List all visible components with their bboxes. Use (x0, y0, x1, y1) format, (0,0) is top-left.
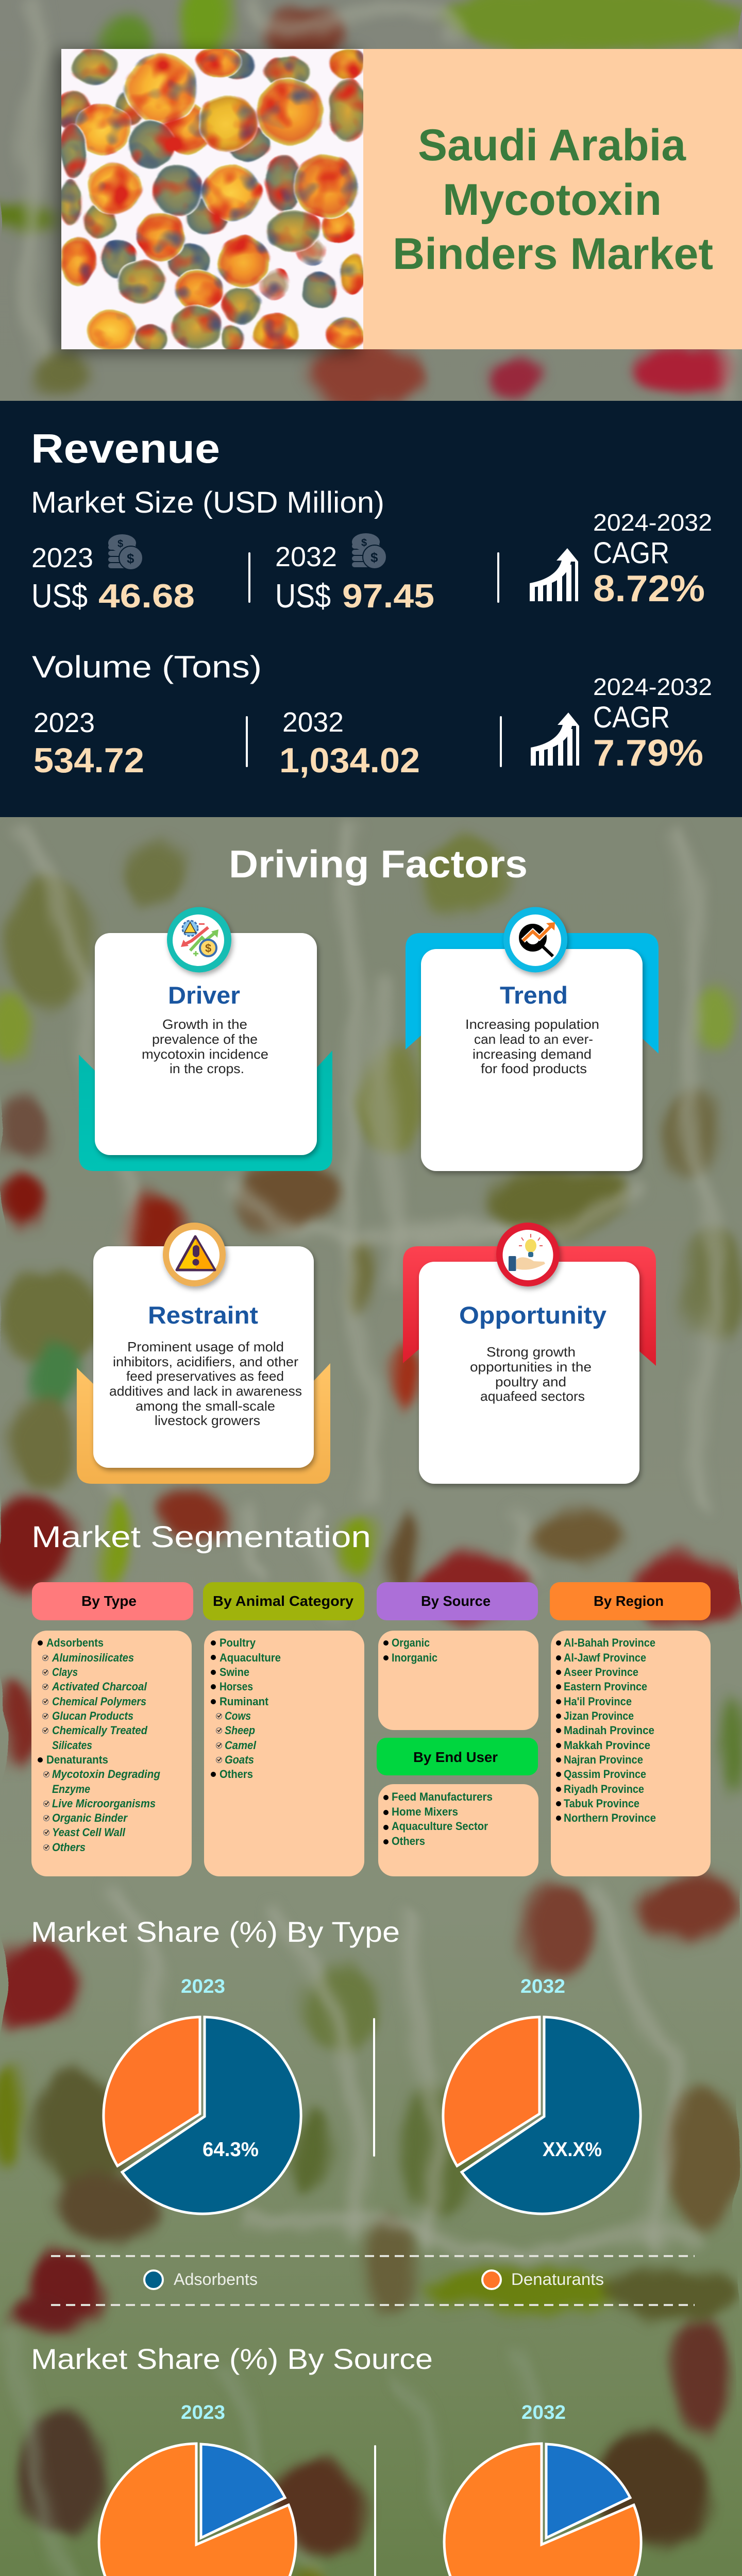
legend: type: Adsorbents (174, 2270, 258, 2289)
list: by type (38, 1636, 161, 1854)
list: by type: Enzyme (52, 1783, 90, 1795)
text: trend body: increasing demand (473, 1046, 592, 1062)
stat: revenue CAGR (593, 509, 712, 609)
icon: growth chart (530, 548, 578, 601)
list: by end user: Others (392, 1835, 425, 1848)
text: opportunity body: opportunities in the (470, 1359, 592, 1375)
list: by type: Aluminosilicates (52, 1651, 134, 1664)
list: by animal category: Poultry (220, 1636, 256, 1649)
text: trend body (465, 1016, 599, 1076)
icon: coins 2023: $ (117, 538, 123, 550)
text: restraint body: Prominent usage of mold (127, 1339, 284, 1354)
text: restraint body: additives and lack in awareness (109, 1383, 302, 1399)
text: restraint body: feed preservatives as feed (126, 1368, 284, 1384)
list: by type: Chemically Treated (52, 1724, 148, 1737)
list: by region: Eastern Province (564, 1680, 647, 1693)
stat: 2032 volume (279, 707, 420, 780)
list: by animal category: Others (220, 1768, 253, 1781)
panel: by animal category: By Animal Category (213, 1593, 353, 1609)
icon: driver (167, 907, 231, 973)
chart: source share 2032: 2032 (521, 2402, 566, 2424)
text: driver body: Growth in the (162, 1016, 247, 1032)
panel: by source (377, 1582, 538, 1730)
list: by region: Ha'il Province (564, 1695, 632, 1708)
panel: opportunity (403, 1223, 656, 1484)
heading: volume: Volume (Tons) (32, 650, 262, 684)
chart: type share 2023: 2023 (181, 1976, 225, 1997)
panel: by end user (377, 1738, 538, 1876)
heading: opportunity: Opportunity (459, 1301, 606, 1329)
panel: by animal category (203, 1582, 364, 1876)
list: by type: Yeast Cell Wall (52, 1826, 126, 1839)
text: restraint body: inhibitors, acidifiers, and other (113, 1354, 298, 1369)
stat: 2032 volume: 2032 (282, 707, 344, 738)
chart: type share 2023 (104, 1976, 301, 2214)
list: by animal category: Horses (220, 1680, 253, 1693)
stat: volume CAGR (593, 673, 712, 774)
title panel (363, 49, 742, 349)
stat: 2032 market size (275, 533, 434, 615)
list: by region: Northern Province (564, 1811, 656, 1824)
panel: restraint (77, 1223, 330, 1484)
list: by end user (383, 1790, 493, 1848)
icon: coins 2032: $ (361, 537, 367, 549)
panel: by region (550, 1582, 711, 1876)
list: by type: Silicates (52, 1739, 92, 1752)
list: by type: Live Microorganisms (52, 1797, 156, 1810)
panel: trend (406, 907, 659, 1171)
list: by region: Al-Jawf Province (564, 1651, 646, 1664)
list: by type: Clays (52, 1666, 78, 1679)
list: by region: Makkah Province (564, 1739, 650, 1752)
icon: coins 2032: $ (370, 550, 378, 565)
icon: restraint (163, 1223, 226, 1286)
icon: opportunity (496, 1223, 560, 1286)
list: by source (383, 1636, 437, 1664)
text: opportunity body: aquafeed sectors (480, 1388, 585, 1404)
text: restraint body (109, 1339, 302, 1428)
list: by source: Inorganic (392, 1651, 437, 1664)
stat: 2023 volume (33, 707, 144, 780)
title text: Mycotoxin (443, 175, 662, 225)
icon: growth chart volume (531, 713, 579, 766)
panel: by type: By Type (81, 1593, 137, 1609)
stat: volume CAGR: 2024-2032 (593, 673, 712, 700)
list: by region (556, 1636, 656, 1824)
stat: 2032 market size: 97.45 (342, 577, 434, 615)
heading: market size: Market Size (USD Million) (31, 486, 384, 519)
list: by end user: Home Mixers (392, 1805, 458, 1818)
chart: source share 2023: 2023 (181, 2402, 225, 2424)
stat: 2032 volume: 1,034.02 (279, 741, 420, 780)
heading: restraint: Restraint (148, 1301, 258, 1329)
list: by type: Mycotoxin Degrading (52, 1768, 161, 1781)
list: by end user: Feed Manufacturers (392, 1790, 493, 1803)
list: by region: Aseer Province (564, 1666, 638, 1679)
list: by animal category: Cows (225, 1709, 251, 1722)
list: by region: Madinah Province (564, 1724, 654, 1737)
chart: type share 2032: XX.X% (543, 2139, 602, 2161)
list: by end user: Aquaculture Sector (392, 1820, 488, 1833)
text: restraint body: livestock growers (155, 1413, 260, 1428)
heading: revenue: Revenue (31, 426, 220, 471)
heading: driver: Driver (168, 981, 240, 1009)
list: by animal category (211, 1636, 281, 1781)
panel: by source: By Source (421, 1593, 491, 1609)
list: by animal category: Camel (225, 1739, 257, 1752)
title text: Binders Market (393, 229, 713, 279)
list: by region: Al-Bahah Province (564, 1636, 655, 1649)
stat: revenue CAGR: CAGR (593, 536, 669, 570)
heading: trend: Trend (500, 981, 568, 1009)
heading: market share by source: Market Share (%) By Source (31, 2343, 433, 2375)
list: by animal category: Goats (225, 1753, 254, 1766)
stat: 2023 market size: 2023 (31, 543, 93, 573)
stat: 2023 market size (31, 534, 195, 615)
list: by region: Najran Province (564, 1753, 643, 1766)
stat: 2032 market size: US$ (275, 577, 331, 615)
title text (393, 121, 713, 279)
list: by region: Qassim Province (564, 1768, 646, 1781)
text: driver body: mycotoxin incidence (142, 1046, 268, 1062)
chart: source share 2023 (99, 2402, 296, 2576)
list: by animal category: Sheep (225, 1724, 255, 1737)
list: by animal category: Ruminant (220, 1695, 269, 1708)
list: by type: Activated Charcoal (52, 1680, 147, 1693)
text: trend body: Increasing population (465, 1016, 599, 1032)
text: driver body: in the crops. (170, 1061, 244, 1076)
icon: coins 2032 (352, 533, 386, 569)
text: opportunity body (470, 1344, 592, 1404)
panel: driver (79, 907, 332, 1171)
stat: 2032 market size: 2032 (275, 541, 337, 572)
stat: 2023 volume: 2023 (33, 707, 95, 738)
panel: by end user: By End User (413, 1749, 498, 1765)
list: by region: Tabuk Province (564, 1797, 639, 1810)
icon: coins 2023: $ (127, 551, 134, 566)
list: by animal category: Swine (220, 1666, 249, 1679)
panel: by region: By Region (594, 1593, 664, 1609)
icon: driver: $ (205, 942, 211, 955)
list: by type: Adsorbents (46, 1636, 104, 1649)
list: by region: Jizan Province (564, 1709, 634, 1722)
stat: 2023 market size: US$ (31, 577, 88, 615)
list: by animal category: Aquaculture (220, 1651, 281, 1664)
icon: coins 2023 (108, 534, 143, 570)
panel: by type (31, 1582, 193, 1876)
icon: trend (503, 907, 567, 973)
text: trend body: for food products (481, 1061, 587, 1076)
heading: market share by type: Market Share (%) By Type (31, 1916, 400, 1948)
stat: revenue CAGR: 8.72% (593, 568, 705, 609)
list: by type: Organic Binder (52, 1811, 128, 1824)
text: driver body (142, 1016, 268, 1076)
heading: driving factors: Driving Factors (229, 842, 528, 886)
text: trend body: can lead to an ever- (474, 1031, 593, 1047)
text: driver body: prevalence of the (152, 1031, 258, 1047)
stat: revenue CAGR: 2024-2032 (593, 509, 712, 536)
stat: 2023 volume: 534.72 (33, 741, 144, 780)
stat: volume CAGR: 7.79% (593, 733, 703, 774)
chart: type share 2032 (443, 1976, 640, 2214)
text: opportunity body: Strong growth (486, 1344, 576, 1360)
legend: type: Denaturants (511, 2270, 604, 2289)
title text: Saudi Arabia (418, 121, 686, 170)
list: by type: Chemical Polymers (52, 1695, 146, 1708)
text: opportunity body: poultry and (495, 1374, 566, 1389)
heading: market segmentation: Market Segmentation (31, 1520, 371, 1554)
chart: type share 2032: 2032 (520, 1976, 565, 1997)
text: restraint body: among the small-scale (136, 1398, 275, 1414)
list: by type: Glucan Products (52, 1709, 133, 1722)
panel: revenue (0, 401, 742, 817)
stat: 2023 market size: 46.68 (98, 577, 195, 615)
chart: source share 2032 (444, 2402, 641, 2576)
legend: type (144, 2270, 604, 2289)
list: by type: Denaturants (46, 1753, 108, 1766)
list: by region: Riyadh Province (564, 1783, 644, 1795)
chart: type share 2023: 64.3% (203, 2139, 259, 2161)
stat: volume CAGR: CAGR (593, 701, 670, 734)
hero photo: mycotoxin spores (56, 46, 367, 352)
hero banner (56, 46, 742, 352)
list: by type: Others (52, 1841, 86, 1854)
list: by source: Organic (392, 1636, 430, 1649)
